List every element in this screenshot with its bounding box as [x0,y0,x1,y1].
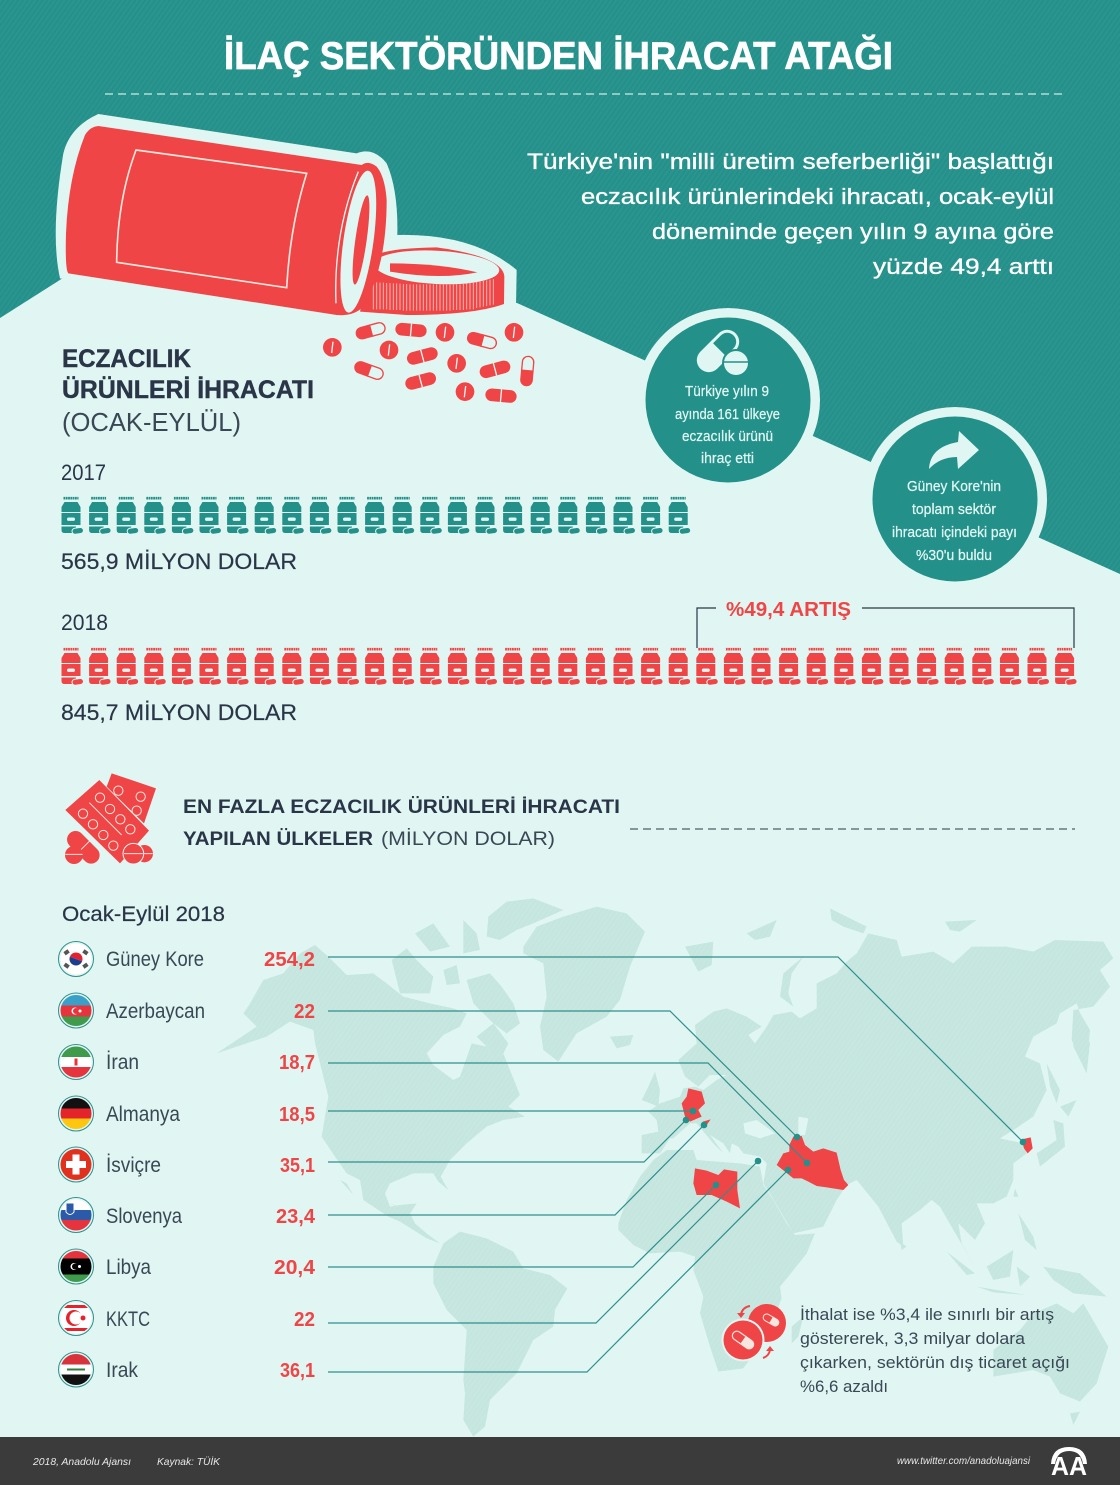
icon: forward arrow [929,431,979,469]
country row: Güney Kore [58,942,315,976]
2017 value: 565,9 MİLYON DOLAR [61,549,297,574]
2018 year label: 2018 [61,610,108,635]
period label: Ocak-Eylül 2018 [62,903,225,926]
callout: 161 countries: ayında 161 ülkeye [675,406,780,423]
connector lines and map dots [328,957,1026,1372]
map: Eurasia [642,908,1113,1267]
section heading: pharmaceutical exports: (OCAK-EYLÜL) [62,407,241,437]
map: Africa, South-East Asia and Australia [618,1150,1108,1425]
country row: İsviçre: 35,1 [280,1155,315,1177]
icon: import pills [722,1304,786,1362]
callout: South Korea share: %30'u buldu [916,547,992,564]
country row: Slovenya: Slovenya [106,1205,182,1228]
country row: Irak: Irak [106,1359,138,1382]
callout: South Korea share: ihracatı içindeki payı [892,524,1017,541]
map: South America [433,1232,567,1437]
highlighted countries on map [682,1088,1033,1208]
callout: South Korea share: Güney Kore'nin [907,478,1001,495]
icon: pill bottle and pills [56,114,535,403]
callout: 161 countries [636,308,820,492]
icon: capsule and tablet [692,325,749,377]
callout: South Korea share [863,407,1047,591]
country row: İran [58,1044,315,1080]
country row: KKTC [58,1300,315,1336]
footer bar: www.twitter.com/anadoluajansi [897,1455,1031,1467]
country row: İran: 18,7 [279,1052,315,1074]
country row: İsviçre: İsviçre [106,1154,161,1177]
country row: KKTC: 22 [294,1309,315,1331]
callout: 161 countries: ihraç etti [701,450,754,467]
import note: göstererek, 3,3 milyar dolara [800,1329,1026,1348]
country row: Libya: 20,4 [274,1257,316,1279]
import note [800,1305,1070,1396]
section heading: pharmaceutical exports: ECZACILIK [62,345,191,373]
footer bar [0,1437,1120,1485]
country row: Libya [58,1249,316,1284]
country row: Almanya [58,1096,315,1131]
country row: Irak [58,1352,315,1387]
country row: KKTC: KKTC [106,1308,150,1331]
title: İLAÇ SEKTÖRÜNDEN İHRACAT ATAĞI [224,34,893,78]
2017 bottle pictogram [62,498,691,535]
country row: Slovenya [58,1198,316,1232]
callout: 161 countries: eczacılık ürünü [682,428,773,445]
import note: %6,6 azaldı [800,1377,888,1396]
logo: AA: AA [1051,1451,1087,1481]
bottle cap [360,247,504,315]
section heading: pharmaceutical exports: ÜRÜNLERİ İHRACATI [62,375,314,404]
country row: İsviçre [58,1147,315,1182]
bottle body [66,126,387,315]
2018 bottle pictogram [62,649,1077,686]
country row: İran: İran [106,1051,139,1074]
spilled pills [323,321,535,403]
2018 value: 845,7 MİLYON DOLAR [61,700,297,725]
section heading: top export countries: EN FAZLA ECZACILIK ÜRÜNLERİ İHRACATI [183,797,620,818]
footer bar: 2018, Anadolu Ajansı [32,1456,131,1468]
increase bracket and label [697,599,1074,648]
footer bar: Kaynak: TÜİK [157,1456,221,1468]
icon: blister packs [63,773,156,868]
world map [217,898,1113,1437]
2017 year label: 2017 [61,460,106,485]
country row: Libya: Libya [106,1256,151,1279]
country row: Almanya: Almanya [106,1103,180,1126]
country row: Slovenya: 23,4 [276,1206,316,1228]
section heading: pharmaceutical exports [62,345,314,437]
callout: South Korea share: toplam sektör [912,501,996,518]
intro paragraph: eczacılık ürünlerindeki ihracatı, ocak-eylül [581,184,1054,209]
intro paragraph: yüzde 49,4 arttı [873,254,1054,279]
intro paragraph [527,149,1054,279]
section heading: top export countries: YAPILAN ÜLKELER [183,829,373,850]
teal header band [0,0,1120,574]
callout: 161 countries: Türkiye yılın 9 [685,383,769,400]
map: Americas, Greenland and Arctic [217,898,660,1243]
section heading: top export countries: (MİLYON DOLAR) [381,829,555,850]
section heading: top export countries [183,797,620,850]
country row: Azerbaycan: Azerbaycan [106,1000,205,1023]
country row: Güney Kore: 254,2 [264,949,315,971]
country row: Güney Kore: Güney Kore [106,948,204,971]
import note: çıkarken, sektörün dış ticaret açığı [800,1353,1070,1372]
import note: İthalat ise %3,4 ile sınırlı bir artış [800,1305,1054,1324]
intro paragraph: Türkiye'nin "milli üretim seferberliği" başlattığı [527,149,1054,174]
country row: Azerbaycan [58,993,315,1028]
country row: Irak: 36,1 [280,1360,315,1382]
intro paragraph: döneminde geçen yılın 9 ayına göre [652,219,1054,244]
increase bracket and label: %49,4 ARTIŞ [726,599,851,621]
country row: Almanya: 18,5 [279,1104,315,1126]
country row: Azerbaycan: 22 [294,1001,315,1023]
